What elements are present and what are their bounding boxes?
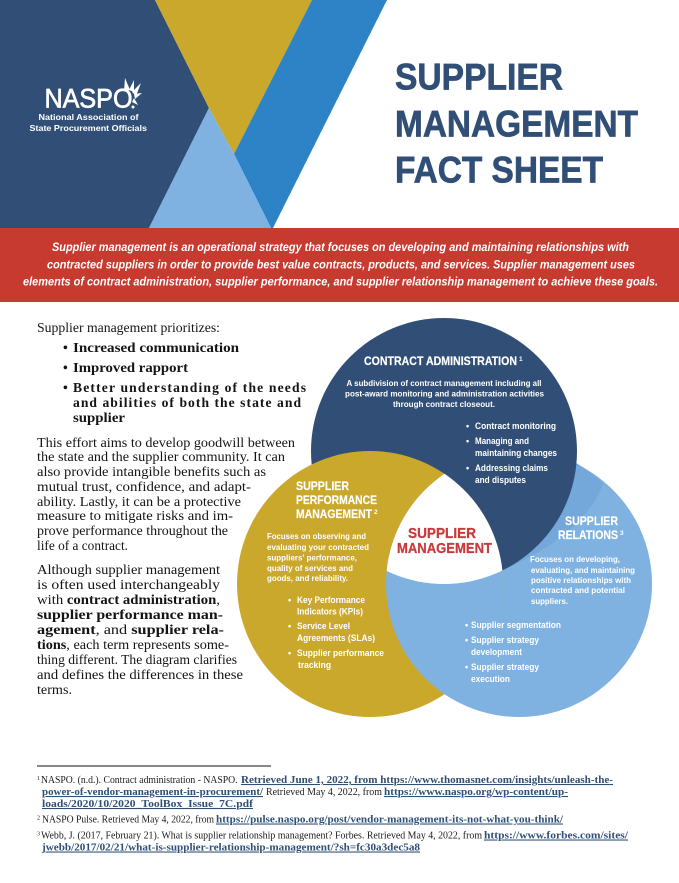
footnotes: 2 bbox=[37, 816, 40, 822]
supplier relations text bbox=[465, 514, 635, 684]
contract administration text: A subdivision of contract management including all bbox=[346, 378, 542, 388]
circle: supplier performance management bbox=[237, 451, 503, 717]
supplier relations text: • bbox=[465, 635, 468, 645]
text block: goodwill paragraph: This effort aims to develop goodwill between bbox=[37, 436, 295, 451]
center label: SUPPLIER bbox=[408, 526, 476, 542]
contract administration text: • bbox=[466, 421, 469, 431]
supplier performance management text: • bbox=[288, 595, 291, 605]
footnotes: https://www.forbes.com/sites/ bbox=[484, 830, 629, 842]
circle: contract administration bbox=[311, 318, 577, 584]
supplier relations text: Supplier strategy bbox=[471, 635, 539, 645]
footnotes: 3 bbox=[37, 832, 40, 838]
text block: priorities: supplier bbox=[73, 410, 125, 425]
supplier relations text: Focuses on developing, bbox=[530, 554, 620, 564]
supplier relations text: Supplier strategy bbox=[471, 662, 539, 672]
NASPO logo: NASPO bbox=[44, 84, 132, 114]
text block: priorities: • bbox=[63, 380, 68, 395]
supplier relations text: • bbox=[465, 620, 468, 630]
supplier performance management text bbox=[267, 479, 384, 670]
supplier performance management text: Supplier performance bbox=[297, 648, 384, 658]
footnotes: NASPO. (n.d.). Contract administration - NASPO. bbox=[41, 775, 240, 786]
title bbox=[395, 56, 638, 191]
text block: goodwill paragraph bbox=[37, 436, 295, 554]
text block: goodwill paragraph: ability. Lastly, it can be a protective bbox=[37, 495, 241, 510]
supplier performance management text: • bbox=[288, 621, 291, 631]
contract administration text: Contract monitoring bbox=[475, 421, 556, 431]
contract administration text: through contract closeout. bbox=[393, 399, 495, 409]
supplier performance management text: Agreements (SLAs) bbox=[297, 633, 375, 643]
text block: priorities: Improved rapport bbox=[73, 360, 189, 375]
contract administration text: • bbox=[466, 463, 469, 473]
title: SUPPLIER bbox=[395, 56, 563, 98]
text block: priorities: and abilities of both the state and bbox=[73, 395, 301, 410]
title: MANAGEMENT bbox=[395, 104, 638, 144]
footnotes: Retrieved June 1, 2022, from https://www.thomasnet.com/insights/unleash-the- bbox=[241, 775, 613, 786]
supplier performance management text: Service Level bbox=[297, 621, 350, 631]
text block: goodwill paragraph: measure to mitigate risks and im- bbox=[37, 509, 233, 524]
supplier relations text: evaluating, and maintaining bbox=[531, 565, 635, 575]
center intersection bbox=[386, 474, 502, 584]
NASPO logo: National Association of bbox=[38, 112, 139, 122]
supplier relations text: 3 bbox=[620, 530, 624, 537]
footnotes: Webb, J. (2017, February 21). What is supplier relationship management? Forbes. Retrieved May 4, 2022, from bbox=[41, 830, 483, 842]
text block: terminology paragraph: thing different. The diagram clarifies bbox=[37, 653, 237, 668]
supplier relations text: suppliers. bbox=[531, 596, 568, 606]
supplier performance management text: 2 bbox=[374, 509, 378, 516]
text block: terminology paragraph: with contract administration , bbox=[37, 593, 220, 608]
title: FACT SHEET bbox=[395, 150, 603, 191]
text block: terminology paragraph: Although supplier management bbox=[37, 563, 220, 578]
text block: priorities: • bbox=[63, 340, 68, 355]
supplier performance management text: • bbox=[288, 648, 291, 658]
supplier relations text: RELATIONS bbox=[558, 528, 618, 542]
footnotes bbox=[37, 766, 629, 854]
contract administration text: • bbox=[466, 436, 469, 446]
contract administration text: post-award monitoring and administration activities bbox=[345, 388, 544, 398]
text block: goodwill paragraph: also provide intangible benefits such as bbox=[37, 465, 266, 480]
supplier performance management text: tracking bbox=[298, 660, 331, 670]
text block: goodwill paragraph: mutual trust, confidence, and adapt- bbox=[37, 480, 251, 495]
supplier relations text: contracted and potential bbox=[531, 585, 625, 595]
footnotes: Retrieved May 4, 2022, from bbox=[266, 787, 383, 798]
NASPO logo: State Procurement Officials bbox=[30, 123, 147, 133]
contract administration text bbox=[345, 354, 557, 485]
supplier performance management text: evaluating your contracted bbox=[267, 542, 369, 552]
center label: MANAGEMENT bbox=[397, 541, 492, 557]
contract administration text: maintaining changes bbox=[475, 448, 557, 458]
footnotes: https://www.naspo.org/wp-content/up- bbox=[384, 787, 568, 798]
contract administration text: 1 bbox=[519, 356, 523, 363]
venn diagram bbox=[237, 318, 652, 717]
supplier relations text: Supplier segmentation bbox=[471, 620, 561, 630]
text block: terminology paragraph: supplier performance man- bbox=[37, 608, 223, 623]
footnotes: https://pulse.naspo.org/post/vendor-management-its-not-what-you-think/ bbox=[216, 814, 564, 826]
text block: priorities: Increased communication bbox=[73, 340, 239, 355]
footnotes: jwebb/2017/02/21/what-is-supplier-relationship-management/?sh=fc30a3dec5a8 bbox=[41, 842, 420, 854]
overlap: relations over performance bbox=[386, 474, 503, 694]
text block: priorities: Better understanding of the needs bbox=[73, 380, 306, 395]
supplier performance management text: Key Performance bbox=[297, 595, 365, 605]
overlap tint crescent bbox=[505, 463, 603, 569]
supplier performance management text: goods, and reliability. bbox=[267, 573, 348, 583]
supplier performance management text: suppliers' performance, bbox=[267, 552, 357, 562]
text block: priorities bbox=[37, 321, 306, 425]
supplier performance management text: Indicators (KPIs) bbox=[297, 606, 363, 616]
center label bbox=[397, 526, 492, 557]
contract administration text: CONTRACT ADMINISTRATION bbox=[364, 354, 517, 368]
supplier performance management text: quality of services and bbox=[267, 563, 353, 573]
contract administration text: Addressing claims bbox=[475, 463, 548, 473]
footnotes: loads/2020/10/2020_ToolBox_Issue_7C.pdf bbox=[42, 799, 254, 810]
supplier relations text: SUPPLIER bbox=[565, 514, 618, 528]
footnotes: 1 bbox=[37, 776, 40, 782]
contract administration text: Managing and bbox=[475, 436, 529, 446]
text block: terminology paragraph: agement , and supplier rela- bbox=[37, 623, 224, 638]
supplier performance management text: PERFORMANCE bbox=[296, 493, 377, 507]
circle: supplier relations bbox=[386, 451, 652, 717]
supplier relations text: execution bbox=[471, 674, 510, 684]
text block: goodwill paragraph: the state and the supplier community. It can bbox=[37, 450, 285, 465]
supplier performance management text: Focuses on observing and bbox=[267, 531, 366, 541]
text block: priorities: Supplier management prioritizes: bbox=[37, 321, 220, 336]
NASPO logo bbox=[30, 78, 147, 133]
text block: terminology paragraph: is often used interchangeably bbox=[37, 578, 220, 593]
supplier performance management text: MANAGEMENT bbox=[296, 507, 373, 521]
text block: priorities: • bbox=[63, 360, 68, 375]
supplier relations text: development bbox=[471, 647, 522, 657]
supplier performance management text: SUPPLIER bbox=[296, 479, 349, 493]
supplier relations text: positive relationships with bbox=[531, 575, 631, 585]
supplier relations text: • bbox=[465, 662, 468, 672]
footnotes: NASPO Pulse. Retrieved May 4, 2022, from bbox=[42, 814, 215, 826]
text block: terminology paragraph: terms. bbox=[37, 683, 72, 698]
contract administration text: and disputes bbox=[475, 475, 526, 485]
text block: terminology paragraph: tions, each term represents some- bbox=[37, 638, 229, 653]
text block: goodwill paragraph: prove performance throughout the bbox=[37, 524, 228, 539]
intro red band bbox=[0, 228, 679, 302]
header geometric banner bbox=[0, 0, 387, 228]
footnotes: power-of-vendor-management-in-procurement/ bbox=[42, 787, 264, 798]
text block: terminology paragraph: and defines the differences in these bbox=[37, 668, 243, 683]
text block: goodwill paragraph: life of a contract. bbox=[37, 539, 128, 554]
text block: terminology paragraph bbox=[37, 563, 243, 698]
